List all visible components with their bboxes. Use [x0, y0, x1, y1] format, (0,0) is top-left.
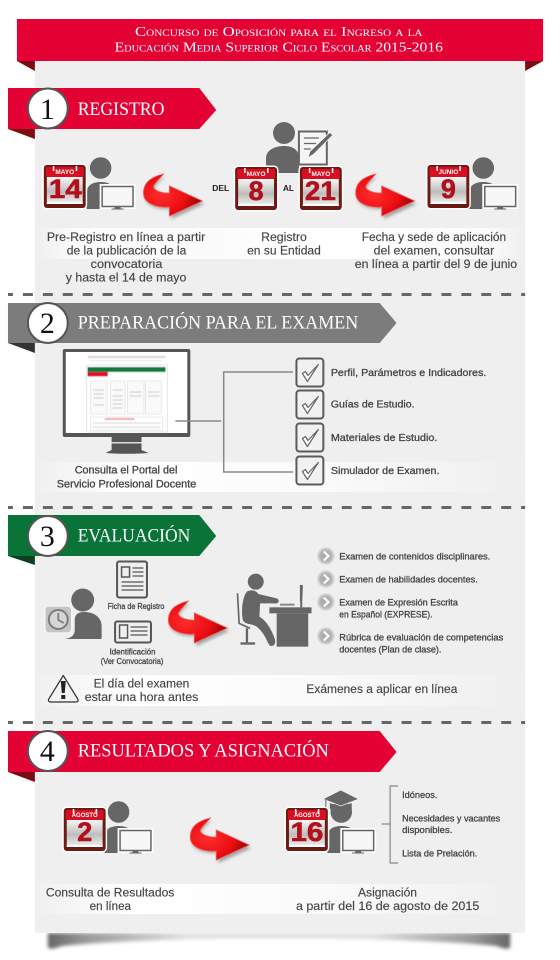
- title banner: [17, 19, 543, 71]
- icon: calendar 16 agosto with graduate: 16: [290, 817, 323, 847]
- date range: person with form, calendars 8 and 21: MAYO: [247, 171, 265, 178]
- checklist: Simulador de Examen.: [331, 466, 439, 477]
- ribbon: section 4 heading: RESULTADOS Y ASIGNACIÓN: [78, 739, 329, 761]
- caption: consulta el portal: Consulta el Portal del: [75, 464, 177, 477]
- checklist: [296, 358, 486, 484]
- caption: el día del examen: estar una hora antes: [85, 690, 198, 704]
- date range: person with form, calendars 8 and 21: [212, 122, 342, 210]
- arrow 2: [356, 174, 417, 219]
- bracket with results list: [382, 786, 500, 863]
- caption: el día del examen: [85, 676, 198, 704]
- icon: identificación: [101, 622, 164, 666]
- icon: calendar 14 mayo with person at computer: MAYO: [55, 169, 74, 176]
- icon: calendar 14 mayo with person at computer: [44, 157, 134, 210]
- ribbon: section 1 heading: REGISTRO: [78, 99, 164, 119]
- caption: pre-registro: [47, 230, 205, 285]
- icon: calendar 2 agosto with person: [64, 801, 152, 854]
- caption: fecha y sede: [355, 230, 518, 271]
- bullet list: exámenes: en Español (EXPRESE).: [339, 609, 432, 621]
- bracket with results list: Lista de Prelación.: [402, 848, 477, 860]
- bullet list: exámenes: Examen de habilidades docentes.: [339, 574, 478, 586]
- bullet list: exámenes: Rúbrica de evaluación de competencias: [339, 632, 503, 644]
- title banner: Concurso de Oposición para el Ingreso a la: [135, 24, 423, 39]
- caption: pre-registro: y hasta el 14 de mayo: [66, 270, 187, 285]
- connector lines: [175, 372, 293, 472]
- arrow 3: [168, 601, 229, 646]
- icon: identificación: Identificación: [110, 646, 156, 657]
- caption: consulta de resultados: [46, 885, 174, 913]
- icon: person with clock: [45, 588, 102, 639]
- caption: asignación: a partir del 16 de agosto de 2015: [296, 899, 480, 913]
- caption: asignación: [296, 885, 480, 913]
- arrow 4: [190, 818, 251, 863]
- caption: registro: [247, 230, 321, 258]
- ribbon: section 2 heading: [8, 303, 397, 353]
- icon: calendar 16 agosto with graduate: ÁGOSTÓ: [294, 810, 320, 819]
- caption: pre-registro: de la publicación de la: [67, 243, 187, 258]
- ribbon: section 3 heading: [8, 515, 216, 565]
- icon: ficha de registro: [108, 562, 165, 611]
- text band: section 2: [35, 462, 525, 492]
- arrow 1: [143, 174, 204, 219]
- icon: calendar 9 junio with person at computer: [427, 157, 517, 210]
- bracket with results list: Idóneos.: [402, 790, 437, 801]
- caption: registro: Registro: [261, 230, 307, 244]
- icon: calendar 9 junio with person at computer: 9: [441, 174, 456, 204]
- caption: pre-registro: Pre-Registro en línea a partir: [47, 230, 205, 244]
- text band: section 3: [35, 675, 525, 706]
- ribbon: section 1 heading: 1: [40, 93, 55, 126]
- bullet list: exámenes: [317, 547, 503, 656]
- caption: fecha y sede: del examen, consultar: [374, 243, 494, 258]
- icon: calendar 16 agosto with graduate: [286, 790, 375, 854]
- text band: section 1 captions: [35, 228, 525, 259]
- caption: fecha y sede: Fecha y sede de aplicación: [362, 230, 506, 244]
- checklist: Guías de Estudio.: [331, 399, 415, 411]
- date range: person with form, calendars 8 and 21: 8: [249, 176, 264, 206]
- date range: person with form, calendars 8 and 21: 21: [305, 176, 336, 206]
- caption: consulta de resultados: en línea: [90, 899, 131, 913]
- caption: exámenes a aplicar en línea: Exámenes a aplicar en línea: [306, 682, 458, 696]
- ribbon: section 4 heading: 4: [40, 735, 55, 768]
- icon: warning triangle: [48, 676, 78, 702]
- title banner: Educación Media Superior Ciclo Escolar 2015-2016: [115, 39, 443, 55]
- bullet list: exámenes: Examen de Expresión Escrita: [339, 597, 459, 609]
- bracket with results list: Necesidades y vacantes: [402, 813, 500, 825]
- icon: calendar 9 junio with person at computer: JUNIO: [439, 169, 458, 176]
- icon: monitor with portal: [63, 349, 190, 454]
- caption: consulta el portal: Servicio Profesional Docente: [57, 478, 196, 491]
- ribbon: section 3 heading: EVALUACIÓN: [78, 524, 190, 546]
- icon: identificación: (Ver Convocatoria): [101, 656, 164, 666]
- ribbon: section 3 heading: 3: [40, 520, 55, 553]
- bullet list: exámenes: docentes (Plan de clase).: [339, 644, 441, 656]
- bullet list: exámenes: Examen de contenidos disciplinares.: [339, 551, 490, 563]
- caption: pre-registro: convocatoria: [91, 257, 163, 271]
- date range: person with form, calendars 8 and 21: AL: [283, 184, 294, 193]
- ribbon: section 2 heading: 2: [40, 307, 55, 340]
- checklist: Perfil, Parámetros e Indicadores.: [331, 368, 486, 379]
- icon: ficha de registro: Ficha de Registro: [108, 601, 165, 611]
- ribbon: section 2 heading: PREPARACIÓN PARA EL EXAMEN: [78, 311, 358, 333]
- icon: calendar 2 agosto with person: 2: [77, 817, 92, 847]
- caption: el día del examen: El día del examen: [94, 676, 189, 691]
- ribbon: section 1 heading: [8, 88, 216, 139]
- date range: person with form, calendars 8 and 21: DEL: [212, 184, 229, 193]
- caption: consulta el portal: [57, 464, 196, 491]
- date range: person with form, calendars 8 and 21: MAYO: [311, 171, 330, 178]
- icon: calendar 2 agosto with person: ÁGOSTÓ: [72, 810, 98, 819]
- text band: section 4: [35, 884, 525, 914]
- bracket with results list: disponibles.: [402, 825, 452, 836]
- checklist: Materiales de Estudio.: [331, 433, 437, 444]
- icon: calendar 14 mayo with person at computer: 14: [49, 174, 82, 204]
- caption: consulta de resultados: Consulta de Resultados: [46, 885, 174, 900]
- icon: person at desk: [237, 574, 312, 647]
- caption: registro: en su Entidad: [247, 243, 321, 258]
- caption: asignación: Asignación: [358, 885, 417, 900]
- ribbon: section 4 heading: [8, 731, 397, 782]
- caption: fecha y sede: en línea a partir del 9 de junio: [355, 257, 518, 271]
